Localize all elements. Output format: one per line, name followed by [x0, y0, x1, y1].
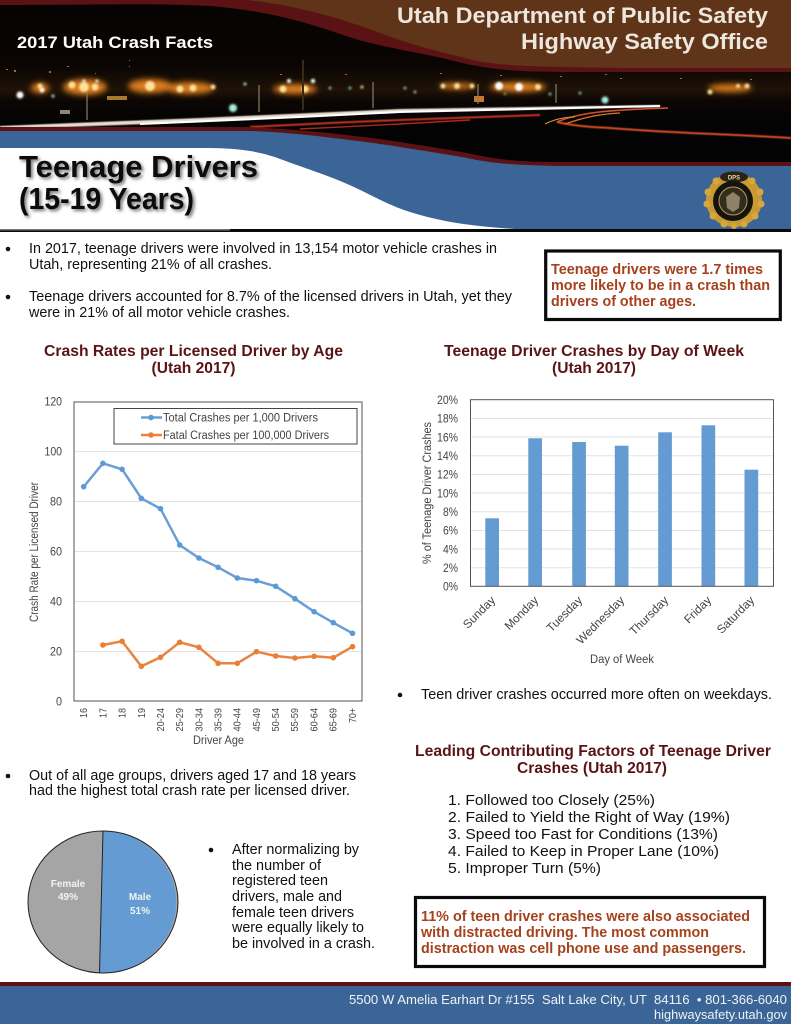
pie chart: male vs female: 49% [58, 892, 78, 903]
bar chart: crashes by day of week: 12% [437, 470, 458, 482]
callout: distracted driving: distraction was cell phone use and passengers. [421, 941, 746, 957]
bar chart: crashes by day of week: 16% [437, 432, 458, 444]
callout: 1.7 times: Teenage drivers were 1.7 times [551, 262, 763, 278]
bar chart: crashes by day of week: Saturday [714, 593, 757, 637]
header banner [0, 0, 791, 232]
legend: Total Crashes per 1,000 Drivers [163, 412, 318, 424]
intro bullets [6, 241, 513, 321]
page title [19, 149, 260, 218]
blue lower wave [0, 131, 791, 232]
bar chart: crashes by day of week [422, 395, 774, 666]
heading: crash rates chart: (Utah 2017) [152, 360, 236, 377]
line chart: crash rates by age: 20 [50, 646, 62, 658]
bar chart: crashes by day of week: 10% [437, 488, 458, 500]
list: contributing factors: 3. Speed too Fast for Conditions (13%) [448, 827, 718, 843]
bullet: normalized gender: After normalizing by [232, 842, 360, 858]
line chart: crash rates by age: 45-49 [251, 708, 263, 732]
list: contributing factors: 1. Followed too Closely (25%) [448, 793, 655, 809]
bar chart: crashes by day of week: Wednesday [573, 593, 627, 647]
white title area [0, 148, 515, 232]
line chart: crash rates by age: 65-69 [328, 708, 340, 732]
brown top wave [247, 0, 791, 68]
pie chart: male vs female: Male [129, 892, 152, 903]
list: contributing factors: 5. Improper Turn (5%) [448, 861, 601, 877]
heading: contributing factors: Crashes (Utah 2017) [517, 760, 667, 777]
maroon top wave [0, 0, 791, 72]
agency name: Utah Department of Public Safety [397, 3, 769, 28]
line chart: crash rates by age: 30-34 [194, 708, 206, 732]
bar chart: crashes by day of week: 20% [437, 395, 458, 407]
page title: Teenage Drivers [19, 149, 258, 184]
line chart: crash rates by age: 70+ [347, 708, 359, 723]
heading: day of week chart [444, 343, 744, 377]
bar chart: crashes by day of week: 8% [443, 507, 458, 519]
bar chart: crashes by day of week: Tuesday [544, 593, 585, 635]
footer: highwaysafety.utah.gov [654, 1008, 788, 1022]
bar chart: crashes by day of week: 2% [443, 563, 458, 575]
line chart: crash rates by age: 17 [98, 708, 110, 718]
list: contributing factors: 4. Failed to Keep in Proper Lane (10%) [448, 844, 719, 860]
line chart: crash rates by age: 0 [56, 696, 62, 708]
bullet: normalized gender: were equally likely to [231, 920, 364, 936]
pie chart: male vs female: 51% [130, 906, 150, 917]
line chart: crash rates by age: 19 [136, 708, 148, 718]
line chart: crash rates by age: 16 [78, 708, 90, 718]
agency name [397, 3, 769, 54]
bar chart: crashes by day of week: Sunday [460, 593, 498, 631]
line chart: crash rates by age: 25-29 [174, 708, 186, 732]
page title: (15-19 Years) [19, 181, 194, 216]
line chart: crash rates by age: 35-39 [212, 708, 224, 732]
bar chart: crashes by day of week: Friday [681, 593, 714, 626]
bullet: highest crash rate [6, 768, 356, 799]
icon: DPS seal [704, 172, 764, 229]
illuminated sign [474, 96, 484, 102]
night road photo [0, 0, 791, 170]
intro bullets: were in 21% of all motor vehicle crashes. [28, 305, 290, 321]
line chart: crash rates by age: Crash Rate per Licensed Driver [29, 482, 41, 622]
bar chart: crashes by day of week: Monday [502, 593, 541, 633]
bullet: normalized gender: the number of [232, 858, 322, 874]
line chart: crash rates by age: 40 [50, 596, 62, 608]
line chart: crash rates by age: 80 [50, 496, 62, 508]
footer [0, 982, 791, 1024]
icon: DPS seal: DPS [728, 176, 740, 182]
bar chart: crashes by day of week: 18% [437, 414, 458, 426]
bullet: normalized gender [209, 842, 375, 952]
bullet: normalized gender: be involved in a crash. [232, 936, 375, 952]
intro bullets: In 2017, teenage drivers were involved in 13,154 motor vehicle crashes in [29, 241, 497, 257]
bullet: normalized gender: drivers, male and [232, 889, 342, 905]
bar chart: crashes by day of week: 4% [443, 544, 458, 556]
page title: (15-19 Years) [21, 183, 196, 218]
list: contributing factors [448, 793, 730, 877]
line chart: crash rates by age: 18 [116, 708, 128, 718]
rule [0, 229, 791, 232]
line: total crashes [81, 460, 355, 636]
bullet: normalized gender: female teen drivers [232, 905, 354, 921]
legend: Fatal Crashes per 100,000 Drivers [163, 430, 329, 442]
pie chart: male vs female: Female [51, 879, 86, 890]
legend [114, 408, 357, 444]
heading: crash rates chart: Crash Rates per Licensed Driver by Age [44, 343, 343, 360]
bar chart: crashes by day of week: 6% [443, 526, 458, 538]
heading: contributing factors [415, 743, 771, 777]
heading: day of week chart: Teenage Driver Crashes by Day of Week [444, 343, 744, 360]
line: fatal crashes [100, 638, 355, 669]
bar chart: crashes by day of week: Day of Week [590, 654, 654, 666]
heading: crash rates chart [44, 343, 343, 377]
bullet: highest crash rate: Out of all age groups, drivers aged 17 and 18 years [29, 768, 356, 784]
callout: distracted driving: with distracted driving. The most common [420, 925, 709, 941]
callout: 1.7 times: more likely to be in a crash than [551, 278, 770, 294]
callout: distracted driving [416, 898, 764, 966]
list: contributing factors: 2. Failed to Yield the Right of Way (19%) [448, 810, 730, 826]
line chart: crash rates by age: 60-64 [308, 708, 320, 732]
agency name: Highway Safety Office [521, 29, 768, 54]
line chart: crash rates by age: 55-59 [289, 708, 301, 732]
line chart: crash rates by age: Driver Age [193, 735, 244, 747]
bar chart: crashes by day of week: 14% [437, 451, 458, 463]
pie chart: male vs female [28, 831, 178, 973]
callout: 1.7 times: drivers of other ages. [551, 294, 696, 310]
line chart: crash rates by age [29, 396, 362, 747]
bar chart: crashes by day of week: Thursday [626, 593, 671, 638]
line chart: crash rates by age: 40-44 [232, 708, 244, 732]
heading: contributing factors: Leading Contributing Factors of Teenage Driver [415, 743, 771, 760]
intro bullets: Utah, representing 21% of all crashes. [29, 257, 272, 273]
callout: 1.7 times [546, 251, 780, 320]
maroon lower wave [0, 127, 791, 232]
line chart: crash rates by age: 50-54 [270, 708, 282, 732]
line chart: crash rates by age: 20-24 [155, 708, 167, 732]
bullet: highest crash rate: had the highest total crash rate per licensed driver. [29, 783, 350, 799]
label: 2017 Utah Crash Facts: 2017 Utah Crash Facts [17, 33, 213, 52]
callout: distracted driving: 11% of teen driver crashes were also associated [421, 909, 750, 925]
bullet: weekdays: Teen driver crashes occurred more often on weekdays. [421, 687, 772, 703]
line chart: crash rates by age: 60 [50, 546, 62, 558]
bar chart: crashes by day of week: % of Teenage Driver Crashes [422, 422, 434, 564]
bar chart: crashes by day of week: 0% [443, 582, 458, 594]
footer: 5500 W Amelia Earhart Dr #155 Salt Lake City, UT 84116 • 801-366-6040 [349, 993, 787, 1007]
line chart: crash rates by age: 100 [44, 446, 62, 458]
bullet: normalized gender: registered teen [232, 873, 328, 889]
heading: day of week chart: (Utah 2017) [552, 360, 636, 377]
page title: Teenage Drivers [21, 151, 260, 186]
line chart: crash rates by age: 120 [44, 396, 62, 408]
intro bullets: Teenage drivers accounted for 8.7% of the licensed drivers in Utah, yet they [29, 289, 513, 305]
